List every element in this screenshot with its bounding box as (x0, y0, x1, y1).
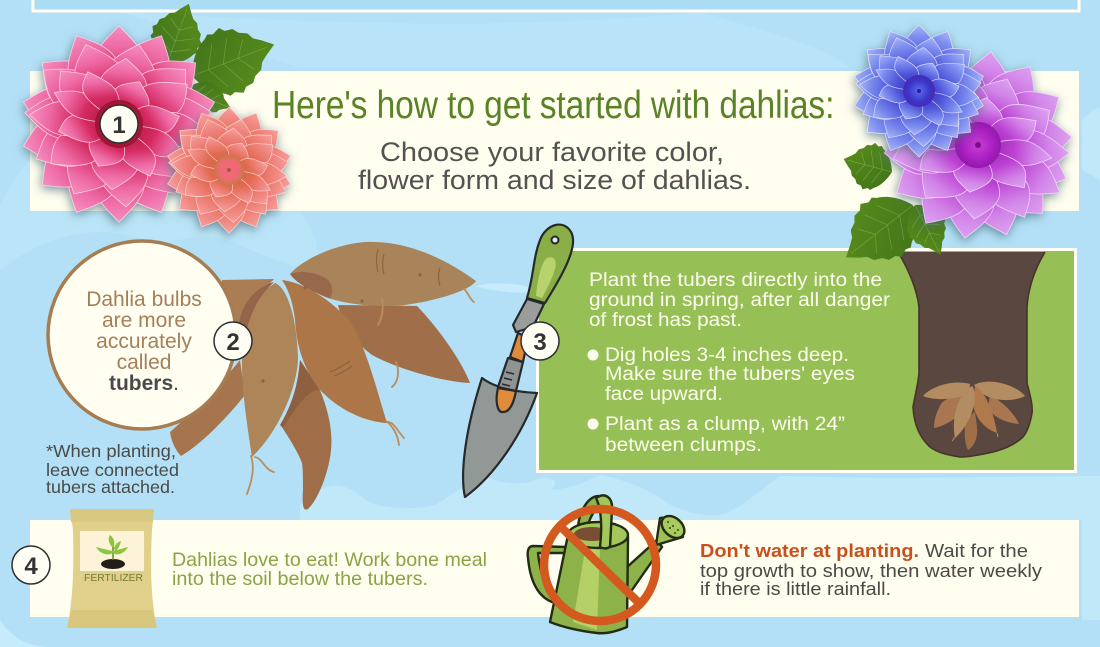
step number 3 (521, 322, 559, 360)
watering text: top growth to show, then water weekly (700, 560, 1043, 581)
fertilizer text: into the soil below the tubers. (172, 568, 428, 590)
banner panel (30, 71, 1079, 211)
icon: purple dahlia (859, 37, 1096, 253)
fertilizer text: Dahlias love to eat! Work bone meal (172, 549, 487, 571)
top cut-off panel (33, 0, 1079, 11)
icon: blue dahlia (841, 22, 996, 162)
title: Here's how to get started with dahlias: (272, 83, 834, 127)
planting instructions text: ground in spring, after all danger (589, 290, 891, 311)
planting instructions text: Plant as a clump, with 24” (605, 414, 845, 435)
subtitle: Choose your favorite color, (380, 137, 724, 167)
planting instructions text: of frost has past. (589, 310, 742, 331)
subtitle (358, 137, 751, 195)
planting panel (538, 250, 1076, 472)
subtitle: flower form and size of dahlias. (358, 165, 751, 195)
callout circle: tubers: are more (102, 309, 186, 332)
watering text: Don't water at planting. (700, 540, 919, 561)
icon: trowel (463, 225, 573, 497)
callout circle: tubers (48, 241, 236, 429)
planting instructions text: face upward. (605, 384, 723, 405)
tuber roots (247, 289, 474, 494)
icon: fertilizer bag (67, 509, 157, 628)
step number 4: 4 (24, 553, 38, 580)
planting instructions text: Dig holes 3-4 inches deep. (605, 345, 849, 366)
step number 1: 1 (112, 112, 126, 139)
watering text: Wait for the (925, 540, 1028, 561)
planting note: leave connected (46, 460, 179, 480)
step number 1 (100, 105, 138, 143)
icon: pink dahlia (4, 21, 233, 230)
soil outline (898, 252, 1045, 457)
icon: watering can with no symbol (528, 495, 689, 633)
small tubers in soil (923, 382, 1025, 450)
leaves: pink flower group (142, 0, 286, 123)
step number 2 (214, 322, 252, 360)
planting instructions text: between clumps. (605, 435, 762, 456)
watering text (700, 540, 1043, 599)
callout circle: tubers: called (117, 351, 171, 374)
callout circle: tubers: tubers. (109, 372, 179, 395)
icon: fertilizer bag: FERTILIZER (84, 573, 143, 584)
planting note: *When planting, (46, 441, 176, 461)
planting instructions text (588, 270, 891, 456)
big tuber clump (170, 242, 476, 510)
step 4 band (30, 520, 1079, 617)
planting note: tubers attached. (46, 477, 175, 497)
planting note (46, 441, 179, 497)
leaves: purple flower group (826, 136, 959, 284)
tuber creases and spots (262, 249, 440, 382)
watering text: if there is little rainfall. (700, 578, 891, 599)
fertilizer text (172, 549, 487, 590)
step number 4 (12, 546, 50, 584)
step number 3: 3 (533, 329, 547, 356)
callout circle: tubers: Dahlia bulbs (86, 288, 202, 311)
step number 2: 2 (226, 329, 240, 356)
icon: coral dahlia (155, 104, 302, 237)
soil cross-section (898, 252, 1045, 457)
planting instructions text: Make sure the tubers' eyes (605, 364, 855, 385)
callout circle: tubers: accurately (96, 330, 192, 353)
planting instructions text: Plant the tubers directly into the (589, 270, 882, 291)
